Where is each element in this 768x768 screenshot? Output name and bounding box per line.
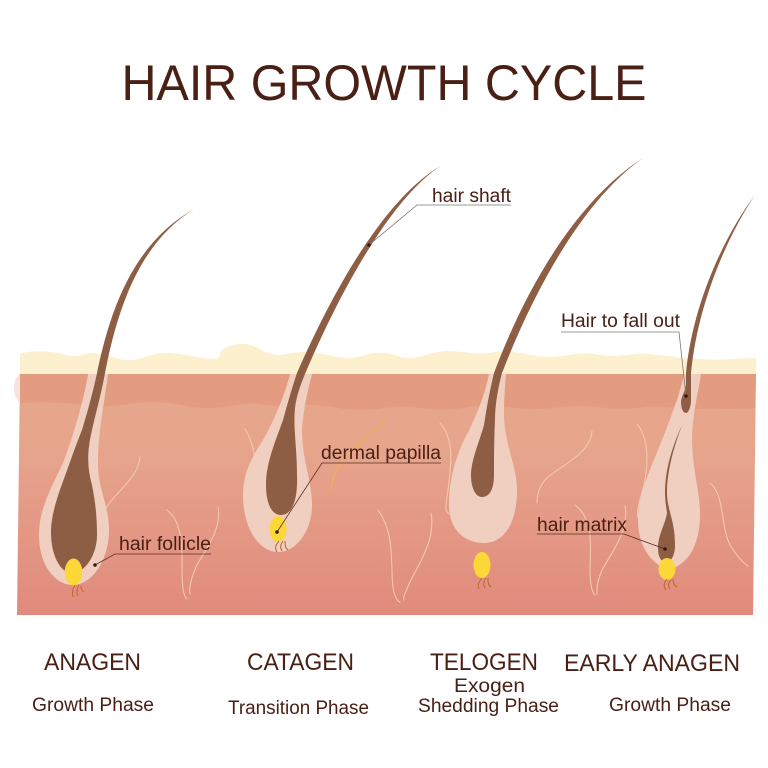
- label: catagen: Transition Phase: [228, 698, 369, 719]
- callout: hair follicle: hair follicle: [119, 534, 211, 555]
- label: anagen: ANAGEN: [44, 649, 141, 676]
- follicle sheath: [39, 374, 109, 585]
- callout: hair matrix: hair matrix: [537, 515, 628, 536]
- roots: [72, 585, 84, 597]
- label: early anagen: Growth Phase: [609, 695, 731, 716]
- label: anagen: Growth Phase: [32, 695, 154, 716]
- callout: hair to fall out: Hair to fall out: [561, 311, 681, 332]
- follicle: telogen: [449, 158, 643, 589]
- detached papilla: [474, 552, 490, 578]
- hair: catagen: [266, 165, 442, 515]
- roots: [276, 541, 288, 552]
- fine dermal hairs: [101, 423, 748, 602]
- callout: dermal papilla: [275, 443, 441, 534]
- label: telogen: Shedding Phase: [418, 696, 559, 717]
- label: catagen: [228, 649, 369, 719]
- dermal papilla: [65, 558, 82, 586]
- callout: hair shaft: hair shaft: [432, 186, 512, 207]
- follicle sheath: [638, 374, 701, 570]
- follicle: catagen: [243, 165, 442, 552]
- label: telogen: [418, 649, 559, 717]
- label: catagen: CATAGEN: [247, 649, 354, 676]
- label: early anagen: [564, 650, 740, 716]
- title: HAIR GROWTH CYCLE: [122, 54, 646, 111]
- callout: hair matrix: [537, 515, 667, 551]
- orange nerve hair: [331, 418, 386, 490]
- follicle sheath: [449, 374, 517, 543]
- follicle: anagen: [39, 209, 194, 597]
- callout: hair to fall out: [561, 311, 688, 398]
- label: telogen: TELOGEN: [430, 649, 538, 676]
- hair: anagen: [51, 209, 194, 573]
- label: telogen: Exogen: [454, 676, 525, 697]
- epidermis layer: [20, 344, 756, 376]
- upper dermis band: [20, 374, 756, 410]
- left edge shadow: [14, 374, 20, 403]
- callout: hair shaft: [367, 186, 512, 247]
- label: early anagen: EARLY ANAGEN: [564, 650, 740, 677]
- follicle sheath: [243, 374, 312, 552]
- label: anagen: [32, 649, 154, 716]
- roots: [664, 579, 677, 590]
- new hair: [658, 425, 682, 562]
- callout: hair follicle: [93, 534, 211, 567]
- hair to fall out: [681, 195, 755, 413]
- dermis layer: [17, 374, 756, 615]
- follicle: early anagen: [638, 195, 755, 590]
- callout: dermal papilla: dermal papilla: [321, 443, 441, 464]
- dermal papilla: [270, 516, 286, 542]
- hair: telogen: [471, 158, 643, 497]
- panel: skin cross-section: [14, 344, 756, 615]
- roots: [478, 578, 491, 589]
- dermal papilla: [658, 558, 676, 580]
